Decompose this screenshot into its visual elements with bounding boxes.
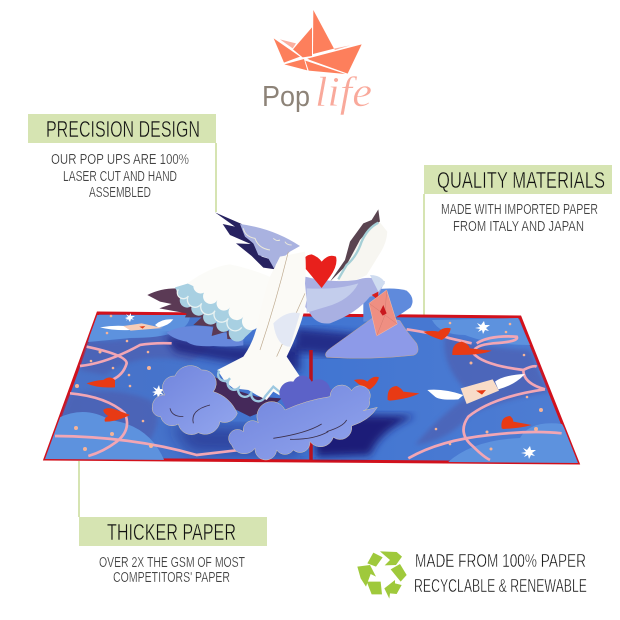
callout: thicker paper <box>79 517 267 586</box>
heading bar <box>424 165 612 194</box>
cloud: back left under wing <box>167 326 243 347</box>
card base <box>40 313 585 465</box>
dove: right wing <box>330 209 387 282</box>
red hearts: center <box>354 377 419 401</box>
description: COMPETITORS' PAPER <box>113 569 230 586</box>
red hearts: left <box>87 377 130 422</box>
pop-up card illustration <box>40 209 585 465</box>
callout: precision design <box>28 114 216 201</box>
envelope in beak <box>369 290 397 336</box>
darker bands <box>60 332 548 445</box>
dots <box>74 315 543 451</box>
wordmark: Pop <box>262 81 310 113</box>
doves and clouds <box>147 209 418 460</box>
description: ASSEMBLED <box>89 184 151 201</box>
light patches <box>40 315 585 465</box>
shadows under pop-up <box>165 328 415 457</box>
cloud cut details <box>170 405 347 439</box>
logo: Poplife <box>262 10 372 116</box>
heading: THICKER PAPER <box>107 519 236 545</box>
winged envelope: left <box>100 319 173 331</box>
dove: front left wing <box>147 264 277 342</box>
cloud: purple lump <box>279 376 337 410</box>
heading bar <box>79 517 267 546</box>
icon: recycle <box>357 551 407 599</box>
description: LASER CUT AND HAND <box>63 168 177 185</box>
cloud: envelope base <box>325 315 418 358</box>
heading: PRECISION DESIGN <box>46 116 200 142</box>
description: OVER 2X THE GSM OF MOST <box>99 554 245 571</box>
red hearts: right <box>423 328 532 429</box>
heading bar <box>28 114 216 143</box>
logo: Poplife: life <box>315 70 372 116</box>
icon: paper boat <box>274 10 362 74</box>
callout: quality materials <box>424 165 612 235</box>
dove: back body <box>305 275 385 324</box>
cloud: front left <box>152 366 237 435</box>
dove: front tail dark <box>207 375 282 417</box>
sparkles <box>125 313 536 459</box>
description: OUR POP UPS ARE 100% <box>51 151 189 168</box>
callout: recyclable <box>357 551 587 599</box>
winged envelope: right <box>427 374 525 404</box>
dove: back wing <box>215 212 300 269</box>
dove: front body <box>217 252 307 401</box>
pink swirl ribbons: right <box>407 329 562 460</box>
center fold <box>309 350 313 460</box>
red heart <box>302 254 336 288</box>
pink swirl ribbons: left <box>55 343 240 456</box>
connector lines <box>79 143 424 517</box>
cloud: back right, blue <box>363 289 413 322</box>
cloud: front right <box>229 385 377 460</box>
